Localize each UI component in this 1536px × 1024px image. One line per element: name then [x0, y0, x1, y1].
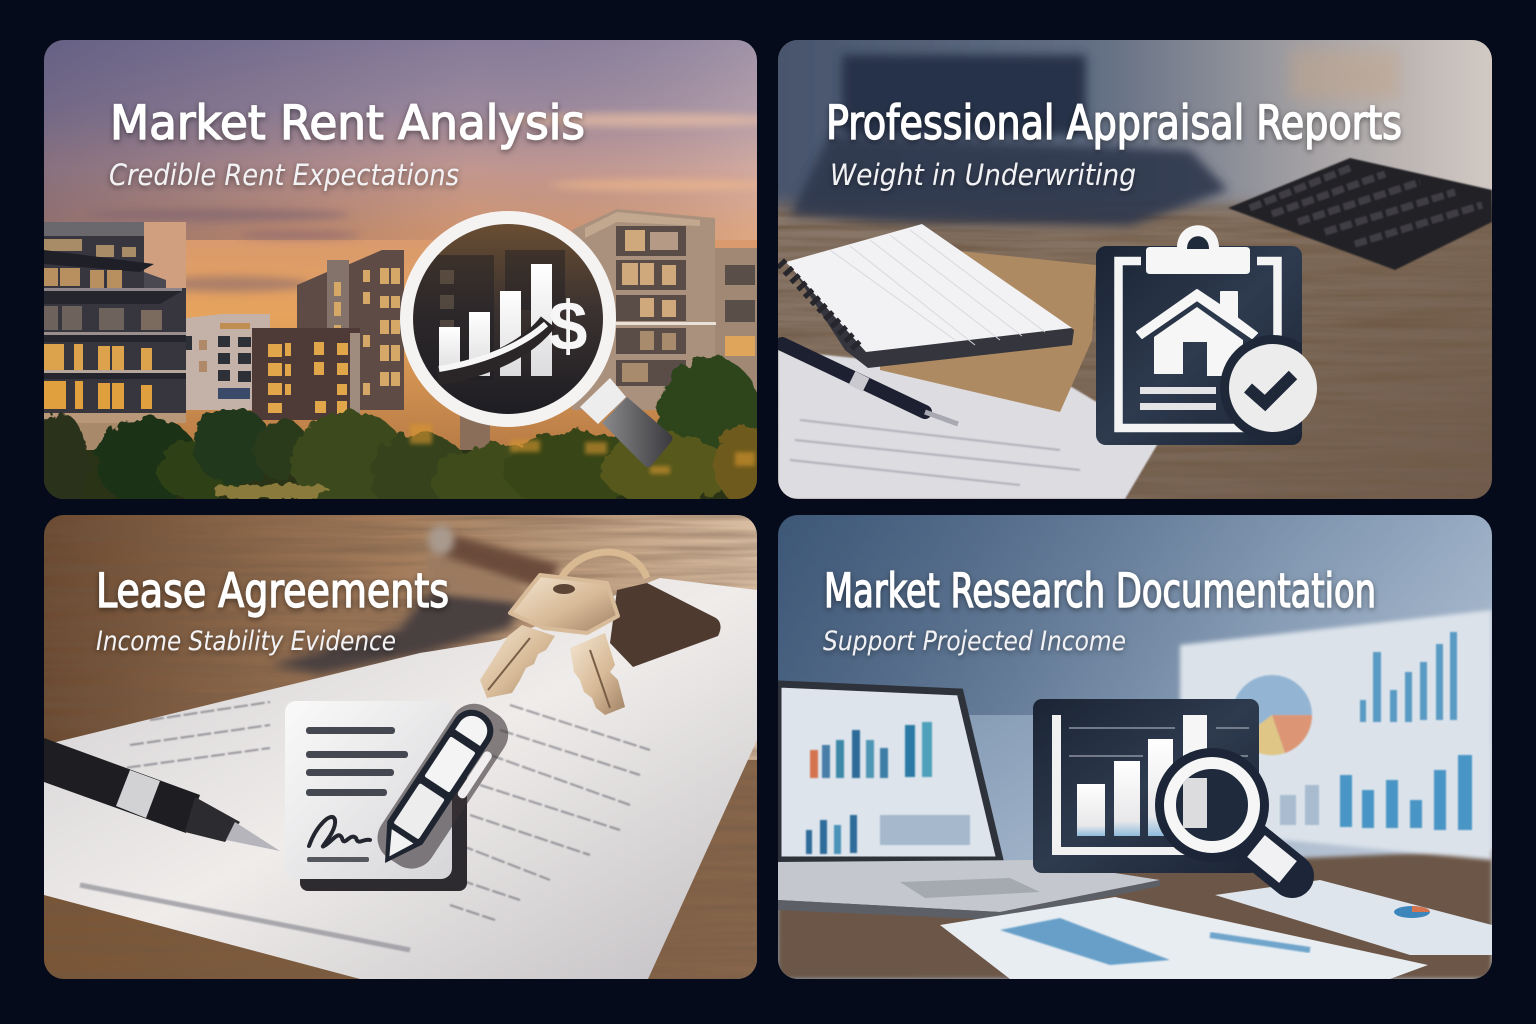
clipboard outline [1118, 261, 1278, 428]
house body [1154, 307, 1243, 376]
back key blade [570, 633, 625, 715]
pen [44, 738, 280, 851]
tall bar [1183, 715, 1207, 785]
blue background [778, 515, 1492, 979]
laptop [778, 684, 1160, 920]
pen tip [379, 829, 413, 863]
magnifier ring [400, 211, 616, 427]
key hole [553, 584, 575, 594]
dollar sign: $ [549, 287, 587, 365]
icon: document with pen [285, 695, 517, 891]
wood table [44, 515, 757, 979]
magnifier collar [580, 378, 626, 424]
document [285, 701, 452, 879]
subheading: Income Stability Evidence [96, 626, 396, 657]
heading: Market Rent Analysis [110, 96, 585, 151]
key grooves [488, 638, 610, 708]
key ring [557, 552, 647, 590]
tree ground mass [44, 450, 757, 499]
chart bars [439, 264, 552, 376]
paper text lines [110, 702, 650, 920]
pen [365, 695, 517, 883]
icon panel [1033, 699, 1259, 873]
lens [411, 222, 605, 416]
pen [782, 344, 958, 424]
wood grain [44, 515, 757, 979]
lower wood [44, 760, 757, 979]
blurred wallet [270, 525, 560, 674]
right building [572, 209, 716, 410]
far right building [715, 248, 757, 392]
pen cap [455, 710, 493, 746]
text lines [1140, 387, 1216, 410]
paper text lines [790, 420, 1080, 485]
clip [1146, 225, 1250, 274]
axis [1052, 715, 1188, 855]
mid brown building [252, 328, 360, 423]
lower bars [1280, 755, 1472, 830]
key fob [610, 583, 721, 667]
icon shadow [300, 725, 467, 891]
blurred backdrop [778, 40, 1492, 214]
keys [480, 552, 647, 715]
subheading: Credible Rent Expectations [109, 158, 459, 192]
bar seen through lens [1183, 778, 1207, 828]
left apartment building [44, 222, 186, 463]
heading: Market Research Documentation [824, 564, 1376, 619]
magnifier halo [1155, 748, 1269, 862]
rising curve [438, 322, 548, 376]
blurred tan object [1290, 50, 1400, 100]
laptop base [778, 860, 1160, 912]
kraft folder [880, 250, 1096, 412]
distant light building [186, 314, 270, 410]
subheading: Weight in Underwriting [830, 158, 1136, 192]
wood desk [778, 40, 1492, 499]
icon: magnifier with rising bars and dollar [400, 211, 672, 467]
pen lower barrel [393, 783, 445, 840]
signature [309, 817, 370, 847]
clouds [90, 113, 780, 292]
check mark [1248, 375, 1293, 403]
subheading: Support Projected Income [823, 626, 1126, 657]
key head [510, 575, 618, 633]
blurred tablet [790, 135, 1228, 226]
check badge [1229, 344, 1317, 432]
check badge halo [1220, 335, 1326, 441]
glowing windows through trees [410, 424, 755, 474]
signature rule [307, 857, 369, 862]
building base behind trees [460, 416, 490, 450]
magnifier ring [1170, 763, 1254, 847]
clipboard body [1096, 246, 1302, 445]
upper bars [1360, 632, 1457, 722]
front key blade [480, 625, 555, 698]
desk [778, 850, 1492, 979]
signature line [80, 885, 410, 950]
icon: clipboard with house and check [1096, 225, 1326, 445]
trees [44, 354, 757, 499]
sunset sky [44, 40, 757, 499]
wall chart board [1180, 610, 1492, 860]
icon: bar chart with magnifier [1033, 699, 1292, 876]
heading: Professional Appraisal Reports [826, 96, 1402, 151]
roof [1137, 290, 1257, 338]
document lines [306, 727, 408, 796]
panel: Market Rent Analysis [36, 40, 780, 517]
pen upper barrel [424, 736, 476, 793]
pie chart [1232, 675, 1312, 755]
desk papers [940, 880, 1492, 979]
gridlines [1069, 728, 1249, 756]
bars [1077, 739, 1173, 836]
wood grain [778, 190, 1492, 499]
blurred monitor [842, 55, 1086, 135]
panel: Market Research Documentation [778, 515, 1492, 979]
keyboard [1228, 158, 1492, 270]
magnifier grip [602, 397, 672, 467]
lease paper [44, 578, 757, 979]
tall brown building [297, 250, 404, 410]
notebook [780, 224, 1074, 368]
report paper [778, 350, 1160, 499]
pen clip [456, 750, 493, 800]
pen barrel outline [367, 702, 501, 875]
heading: Lease Agreements [96, 564, 449, 619]
panel: Professional Appraisal Reports [760, 20, 1510, 499]
laptop chart [806, 722, 970, 854]
panel: Lease Agreements [44, 515, 757, 979]
magnifier handle [1250, 842, 1292, 876]
